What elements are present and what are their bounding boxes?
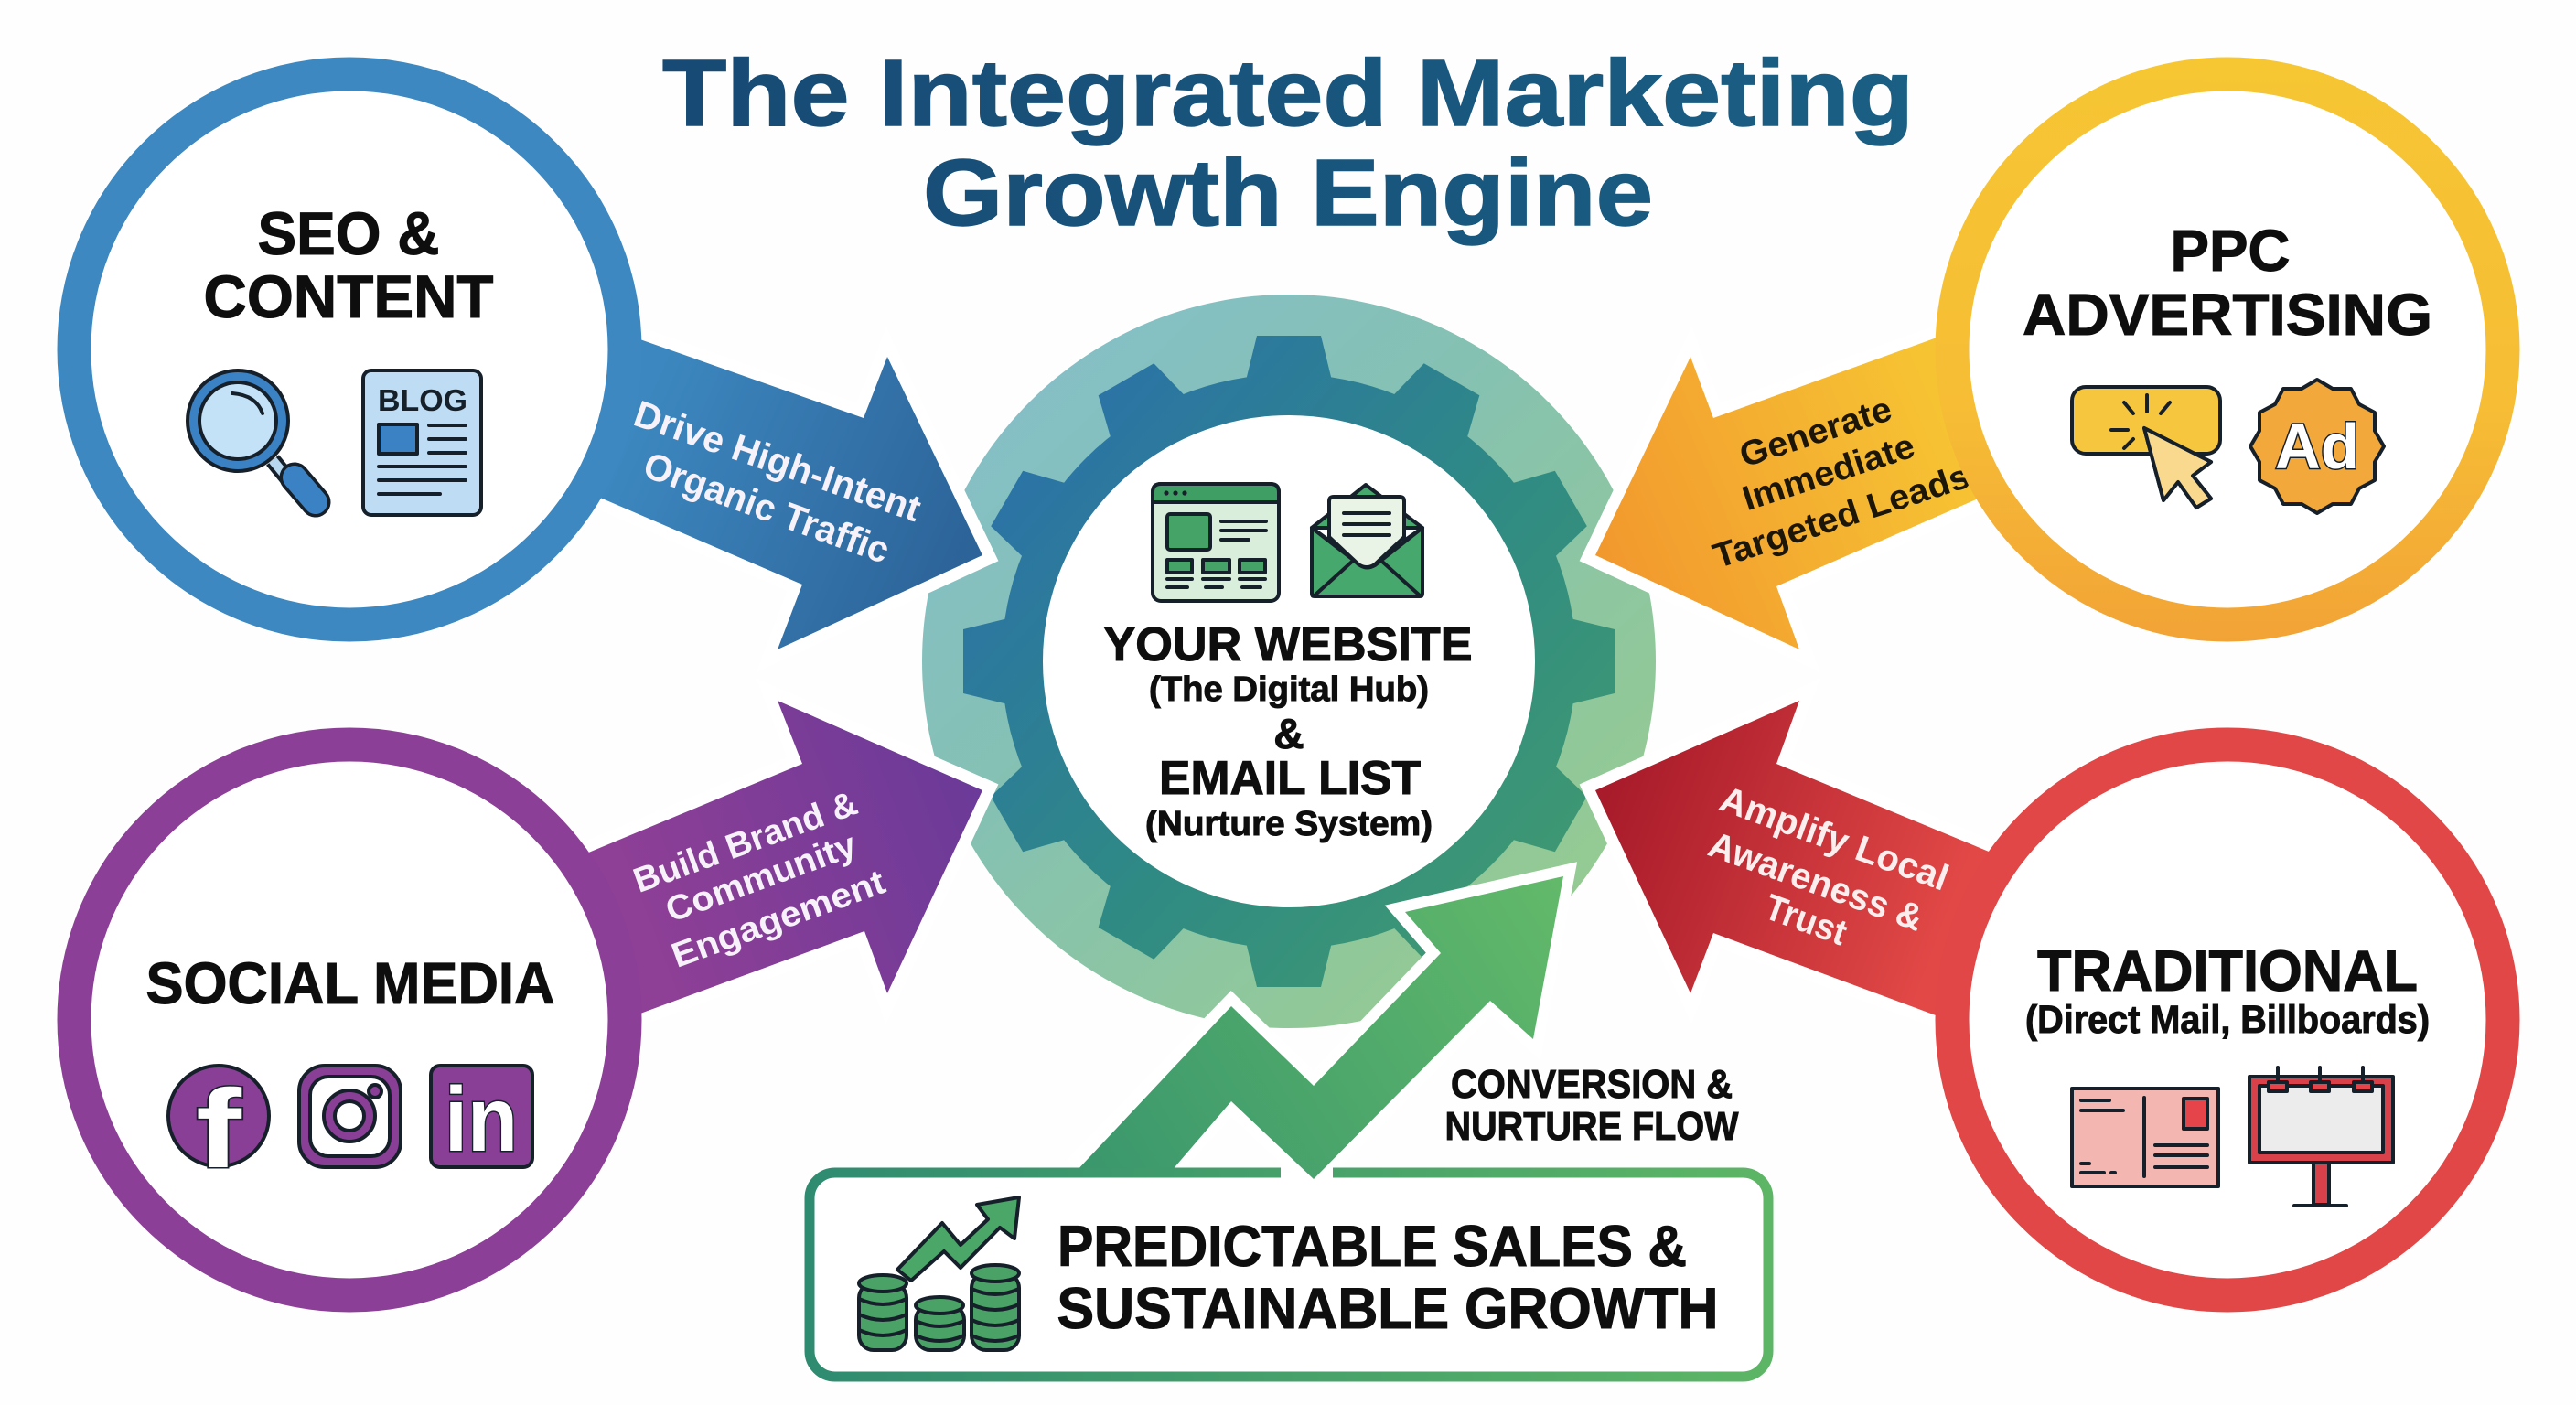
gear outer ring	[922, 295, 1656, 1028]
icon: postcard	[2072, 1089, 2218, 1186]
heading: SOCIAL MEDIA	[146, 950, 554, 1016]
title	[662, 40, 1914, 245]
panel: predictable sales	[810, 1173, 1768, 1377]
arrow: traditional to hub: Amplify Local	[1714, 779, 1954, 898]
arrow: SEO to hub	[549, 320, 982, 649]
hub text: &	[1273, 710, 1304, 757]
title: Growth Engine	[923, 140, 1653, 245]
icon: envelope with letter	[1312, 485, 1422, 596]
gear white centre	[1043, 415, 1535, 907]
heading	[2023, 218, 2432, 348]
hub text: YOUR WEBSITE	[1103, 618, 1473, 671]
box: outcome background	[810, 1173, 1768, 1377]
hub text: (Nurture System)	[1145, 805, 1433, 843]
heading: ADVERTISING	[2023, 282, 2432, 348]
icon: billboard	[2249, 1067, 2393, 1206]
icon: magnifying glass	[188, 370, 316, 502]
icon: ad badge	[2250, 380, 2384, 513]
arrow: SEO to hub: Organic Traffic	[639, 444, 895, 572]
panel: SEO and content	[74, 74, 625, 625]
arrow: traditional to hub: Trust	[1759, 887, 1852, 953]
heading: SEO &	[258, 199, 439, 267]
panel: PPC advertising	[1952, 74, 2503, 625]
arrow: PPC to hub: Generate	[1735, 390, 1896, 476]
title: The Integrated Marketing	[662, 40, 1914, 145]
panel: social media	[74, 745, 625, 1295]
hub text: EMAIL LIST	[1159, 752, 1421, 805]
icon: blog document: BLOG	[378, 383, 467, 417]
label: conversion and nurture flow: NURTURE FLOW	[1445, 1104, 1739, 1149]
arrow: social media to hub: Build Brand &	[628, 784, 863, 901]
icon: website window	[1153, 484, 1279, 601]
icon: ad badge: Ad	[2275, 411, 2359, 482]
arrow: traditional to hub	[1595, 701, 2031, 1034]
hub text	[1103, 618, 1473, 843]
arrow: PPC to hub: Targeted Leads	[1709, 457, 1974, 576]
arrow: SEO to hub: Drive High-Intent	[628, 392, 927, 530]
box border	[810, 1173, 1768, 1377]
icon: facebook: f	[196, 1067, 242, 1191]
outcome text: PREDICTABLE SALES &	[1057, 1215, 1687, 1279]
ring	[1952, 74, 2503, 625]
gear teeth	[963, 336, 1615, 987]
icon: click button	[2072, 387, 2220, 508]
icon: instagram	[299, 1066, 401, 1167]
arrow: growth zigzag	[1075, 876, 1563, 1179]
subheading: (Direct Mail, Billboards)	[2025, 998, 2430, 1042]
label: conversion and nurture flow: CONVERSION &	[1451, 1062, 1733, 1107]
ring	[1952, 745, 2503, 1295]
icon: coins and growth arrow	[859, 1197, 1019, 1350]
heading: TRADITIONAL	[2037, 939, 2418, 1003]
icon: linkedin: in	[445, 1068, 518, 1171]
arrow: social media to hub: Engagement	[667, 863, 891, 976]
panel: traditional	[1952, 745, 2503, 1295]
label: conversion and nurture flow	[1445, 1062, 1739, 1149]
heading: CONTENT	[203, 263, 494, 330]
central gear hub	[915, 274, 1665, 1061]
heading	[203, 199, 494, 330]
arrow: traditional to hub: Awareness &	[1703, 824, 1928, 939]
ring	[74, 74, 625, 625]
arrow: PPC to hub: Immediate	[1738, 427, 1919, 519]
arrow: social media to hub: Community	[660, 826, 862, 930]
hub text: (The Digital Hub)	[1149, 670, 1429, 709]
icon: blog document	[363, 370, 481, 515]
arrow: social media to hub	[549, 701, 982, 1034]
arrow: PPC to hub	[1595, 320, 2031, 649]
panel: predictable sales: SUSTAINABLE GROWTH	[1057, 1277, 1718, 1341]
ring	[74, 745, 625, 1295]
heading: PPC	[2170, 218, 2291, 284]
icon: facebook	[168, 1066, 269, 1191]
